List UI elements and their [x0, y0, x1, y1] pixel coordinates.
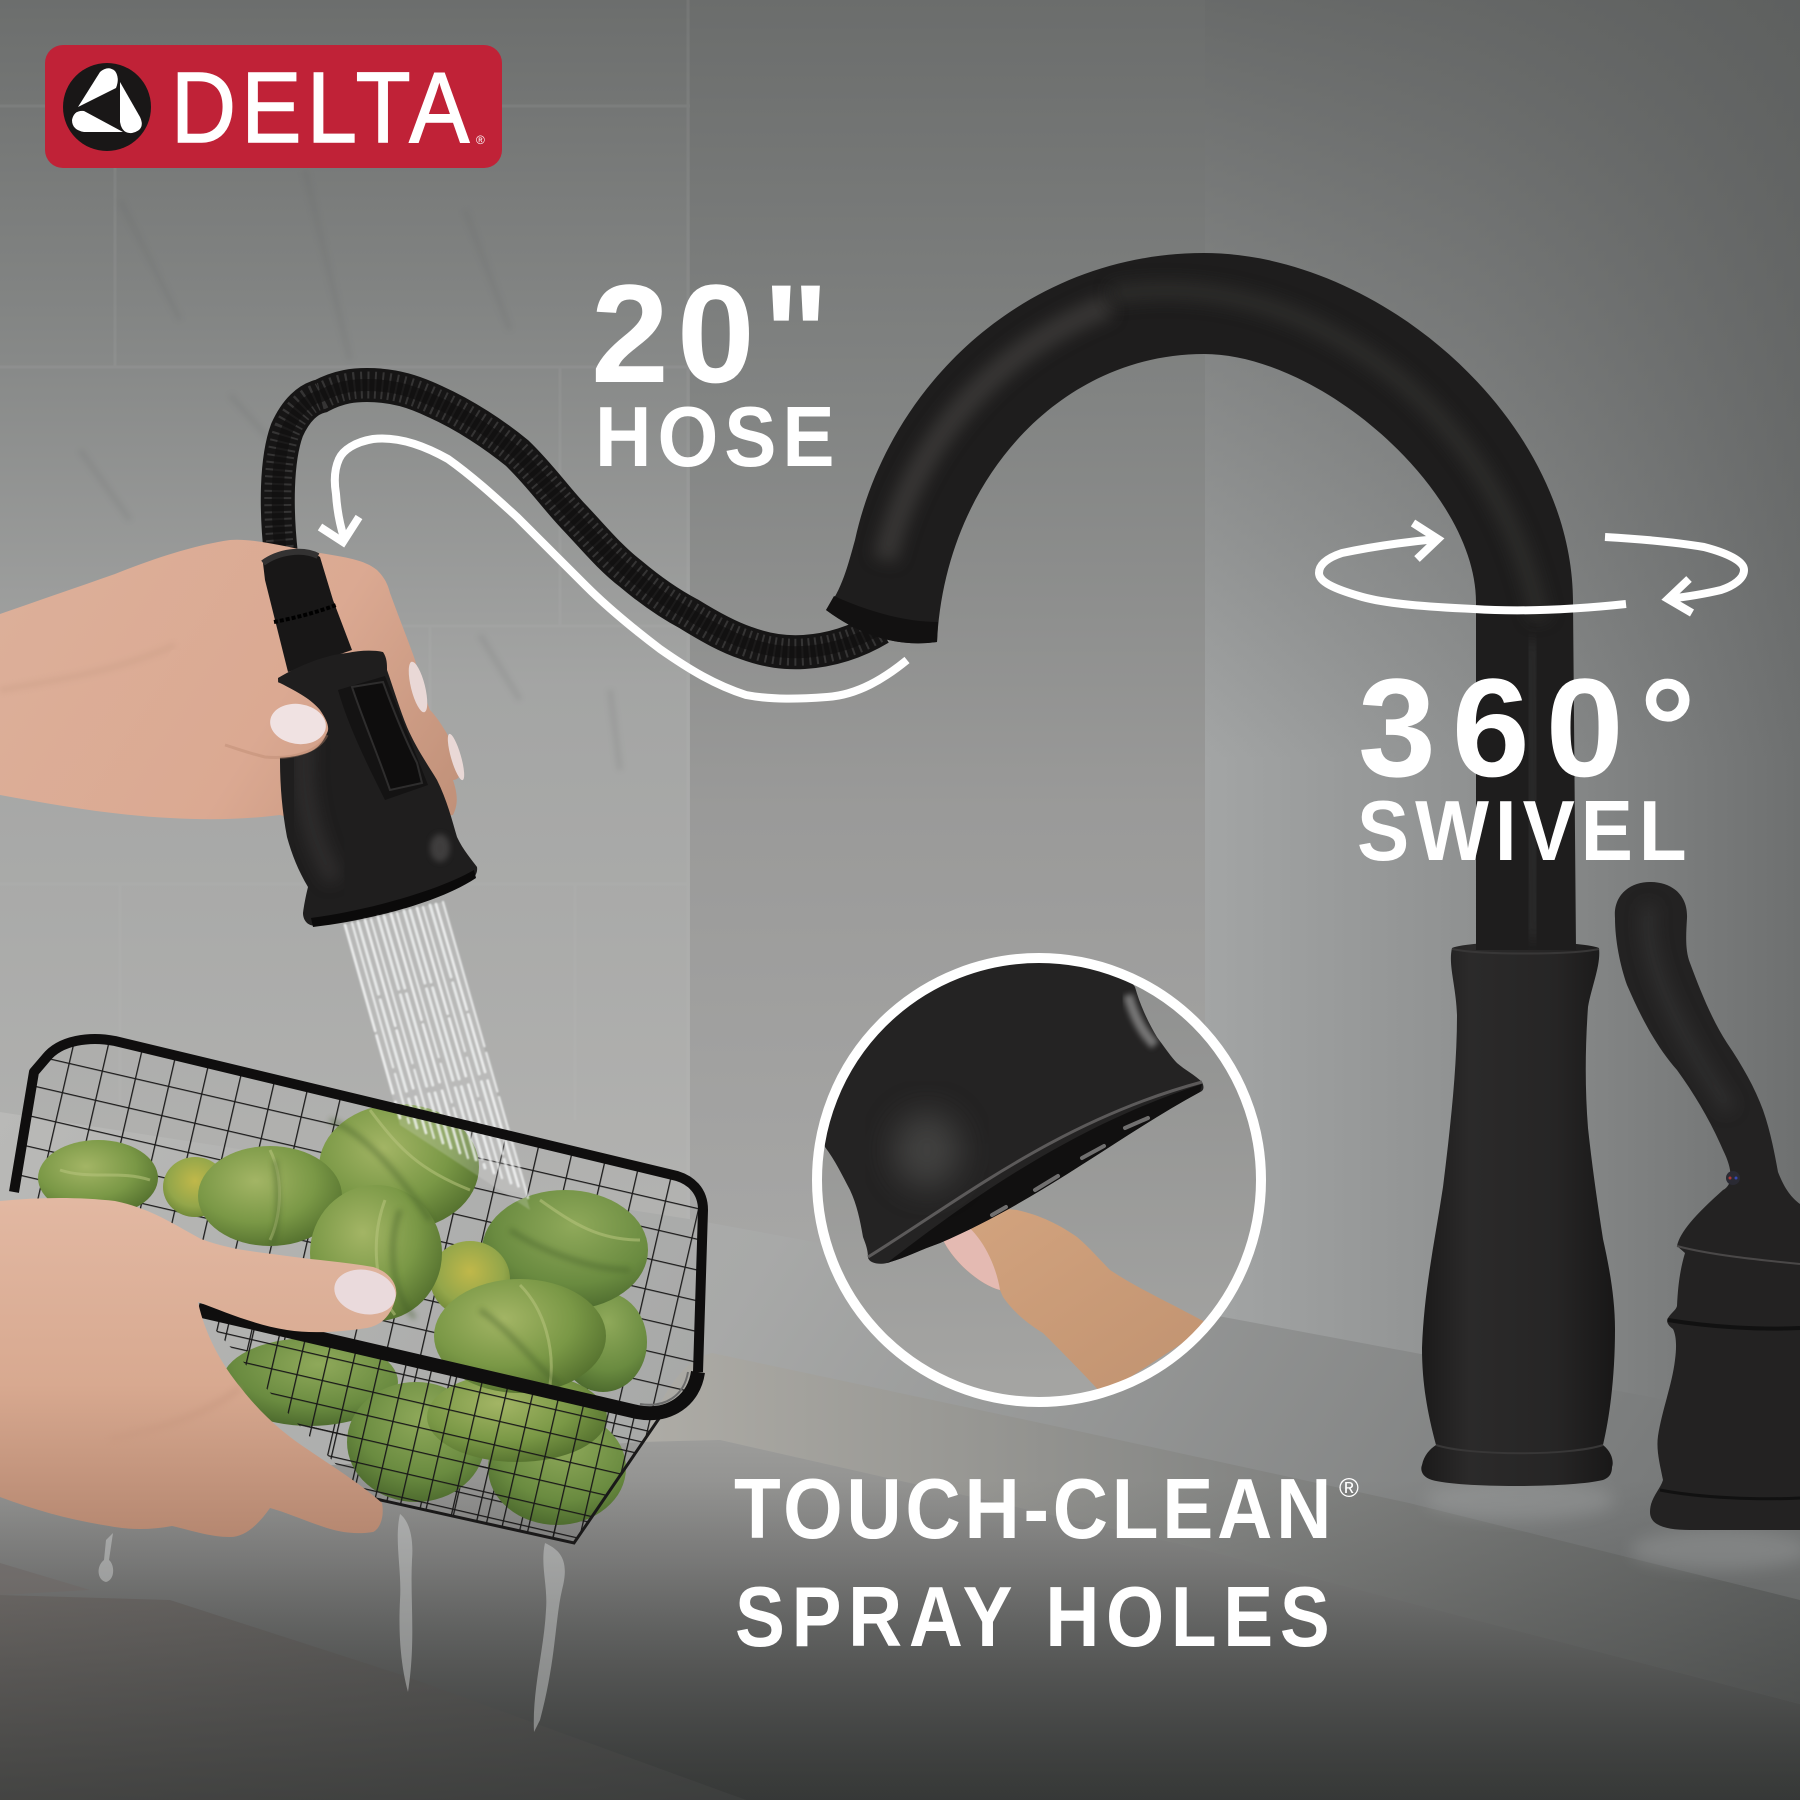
wire basket back wall — [11, 1039, 703, 1543]
braided hose — [278, 385, 880, 652]
callout: 360 degree swivel — [1357, 649, 1712, 879]
callout: 20 inch hose: 20" — [591, 255, 837, 412]
faucet handle — [1615, 882, 1800, 1530]
callout: 20 inch hose — [591, 255, 841, 485]
swivel rotation arrows — [1319, 523, 1744, 613]
white arrow along hose — [320, 438, 907, 699]
pull-down sprayer head — [263, 550, 477, 927]
icon: delta emblem — [63, 63, 151, 151]
delta logo badge — [45, 45, 502, 168]
inset: finger pressing spray hole — [940, 1208, 1210, 1395]
water drips under basket — [99, 1514, 565, 1732]
callout: touch-clean spray holes: SPRAY HOLES — [735, 1570, 1336, 1664]
upper hand behind sprayer — [0, 540, 467, 830]
callout: touch-clean spray holes: ® — [1339, 1473, 1359, 1503]
wire basket front mesh and rim — [14, 1039, 703, 1543]
brussels sprouts — [38, 1104, 648, 1525]
kitchen counter and sink — [0, 1112, 1800, 1800]
faucet base body — [1421, 942, 1615, 1486]
callout: 360 degree swivel: SWIVEL — [1357, 784, 1693, 879]
upper hand thumb and nail — [155, 650, 329, 758]
delta logo badge: DELTA — [171, 53, 475, 164]
callout: 20 inch hose: HOSE — [595, 390, 841, 485]
water spray — [345, 902, 530, 1210]
callout: 360 degree swivel: 360° — [1358, 649, 1712, 806]
callout: touch-clean spray holes: TOUCH-CLEAN — [734, 1462, 1335, 1557]
callout: touch-clean spray holes — [734, 1462, 1359, 1664]
circular inset: touch-clean spray head — [790, 940, 1261, 1402]
delta logo badge: ® — [476, 133, 485, 147]
faucet spout — [826, 253, 1576, 950]
lower hand holding basket — [0, 1198, 400, 1537]
